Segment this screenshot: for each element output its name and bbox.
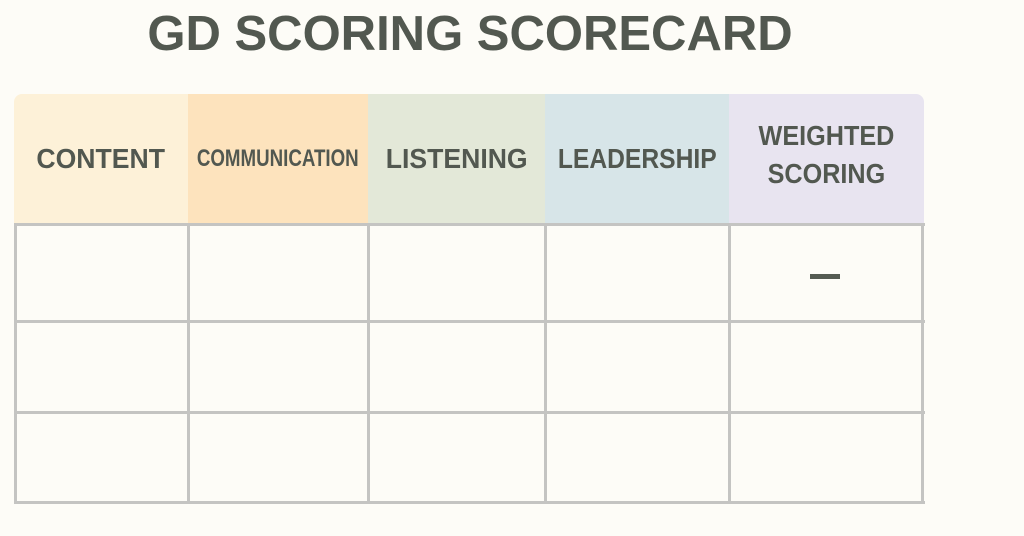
header: weighted scoring: WEIGHTED [759,120,894,151]
header: leadership [545,94,729,224]
header: communication: COMMUNICATION [197,145,359,172]
header: listening: LISTENING [386,143,527,174]
header: weighted scoring: SCORING [768,158,885,189]
title: GD SCORING SCORECARD [147,7,793,61]
header: leadership: LEADERSHIP [558,143,716,174]
header: content [14,94,188,224]
header: weighted scoring [729,94,924,224]
header: content: CONTENT [37,143,165,174]
header: listening [368,94,545,224]
dash in weighted scoring cell [810,274,840,279]
header: communication [188,94,368,224]
